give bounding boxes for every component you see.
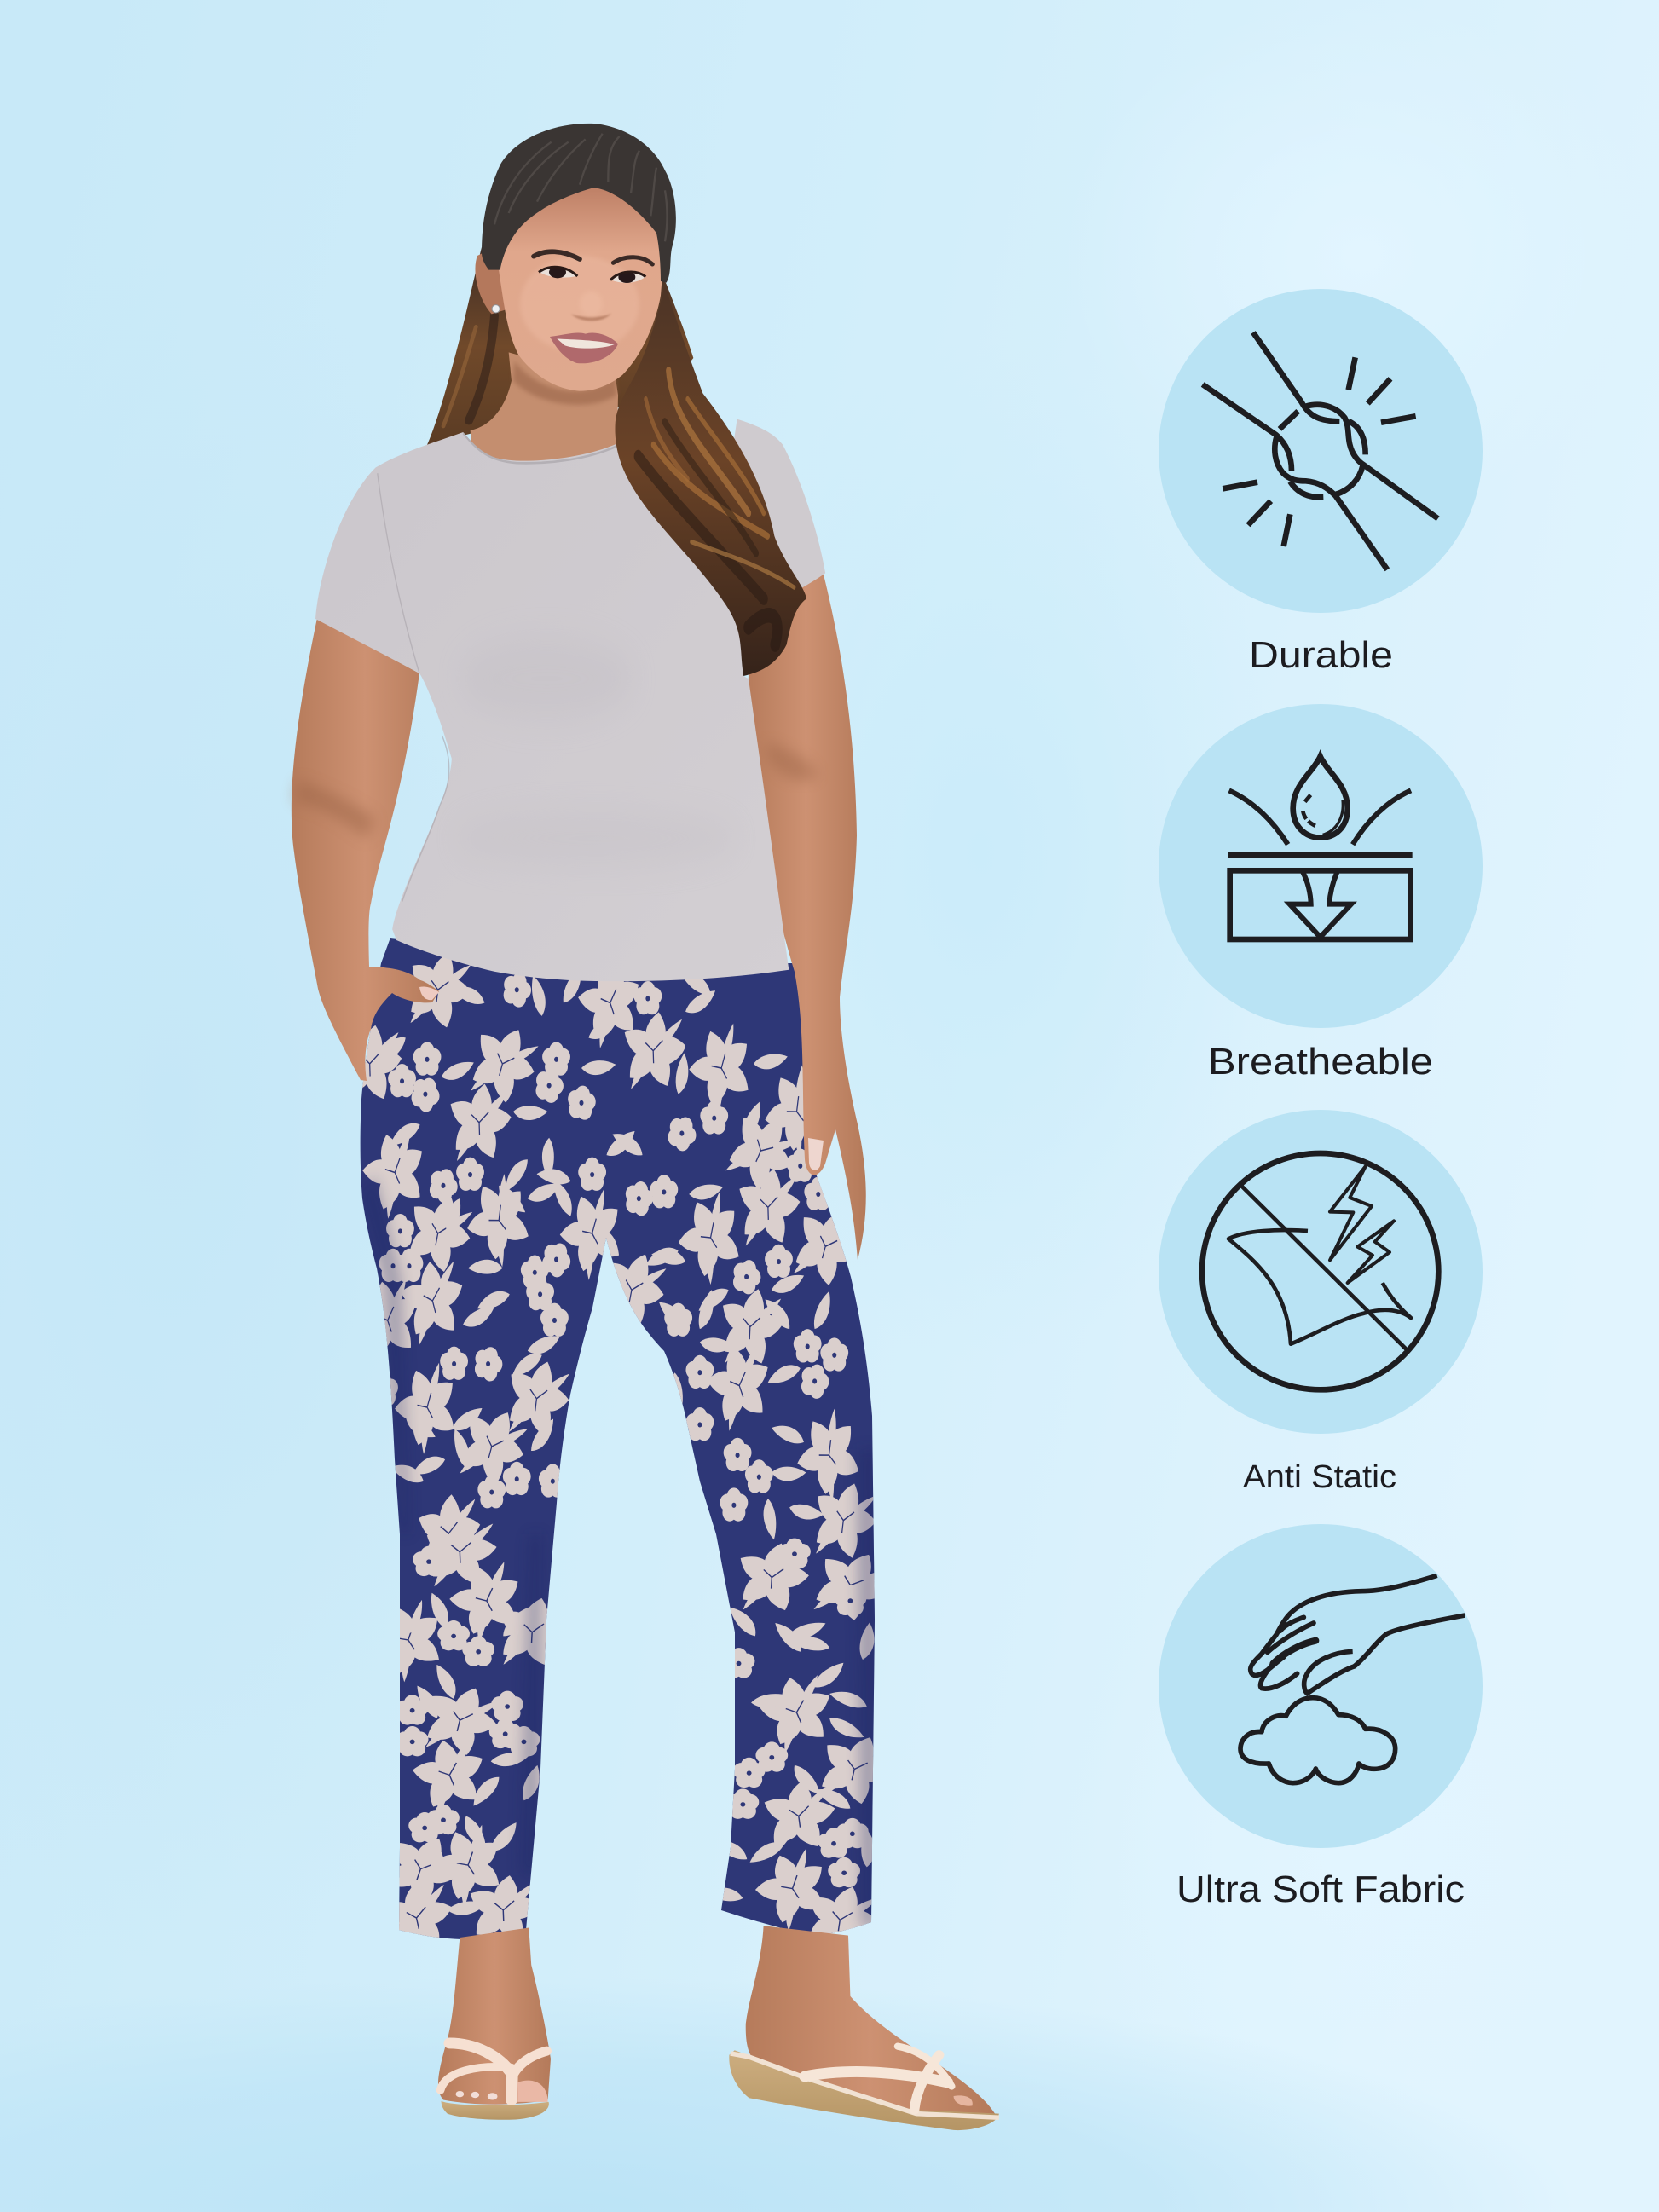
ear — [475, 253, 506, 314]
back hair — [427, 247, 693, 446]
right ankle and foot — [729, 1926, 999, 2130]
left ankle and foot — [438, 1927, 551, 2120]
earring — [492, 305, 500, 313]
model figure — [292, 124, 999, 2130]
right sandal — [729, 2047, 999, 2130]
face — [499, 177, 662, 391]
smile — [550, 332, 618, 363]
icon: no static cloth — [1202, 1153, 1438, 1389]
icon circle — [1159, 1110, 1483, 1434]
icon: knot — [1203, 332, 1438, 569]
nose — [571, 292, 611, 321]
floral print — [330, 939, 905, 1970]
label: Ultra Soft Fabric — [1176, 1868, 1465, 1910]
left arm and hand — [292, 618, 439, 1081]
pants shading — [361, 1176, 878, 1926]
feature: durable — [1159, 289, 1483, 676]
feature: ultra soft fabric — [1159, 1524, 1483, 1910]
icon: hand over cloud — [1240, 1575, 1465, 1783]
eyebrows — [534, 251, 652, 264]
left sandal — [441, 2043, 549, 2120]
neck — [471, 352, 618, 471]
label: Durable — [1249, 634, 1393, 676]
label: Anti Static — [1243, 1459, 1396, 1495]
feature: anti static — [1159, 1110, 1483, 1495]
patterned pants — [360, 938, 875, 1939]
hair top — [482, 124, 676, 283]
head — [475, 124, 676, 391]
icon: water drop and membrane — [1228, 756, 1413, 939]
feature: breatheable — [1159, 704, 1483, 1083]
eyes — [539, 266, 645, 283]
icon circle — [1159, 1524, 1483, 1848]
icon circle — [1159, 289, 1483, 613]
icon circle — [1159, 704, 1483, 1028]
hair front lock — [615, 285, 806, 676]
t-shirt — [315, 419, 825, 981]
right arm and hand — [746, 571, 866, 1260]
label: Breatheable — [1208, 1041, 1433, 1083]
